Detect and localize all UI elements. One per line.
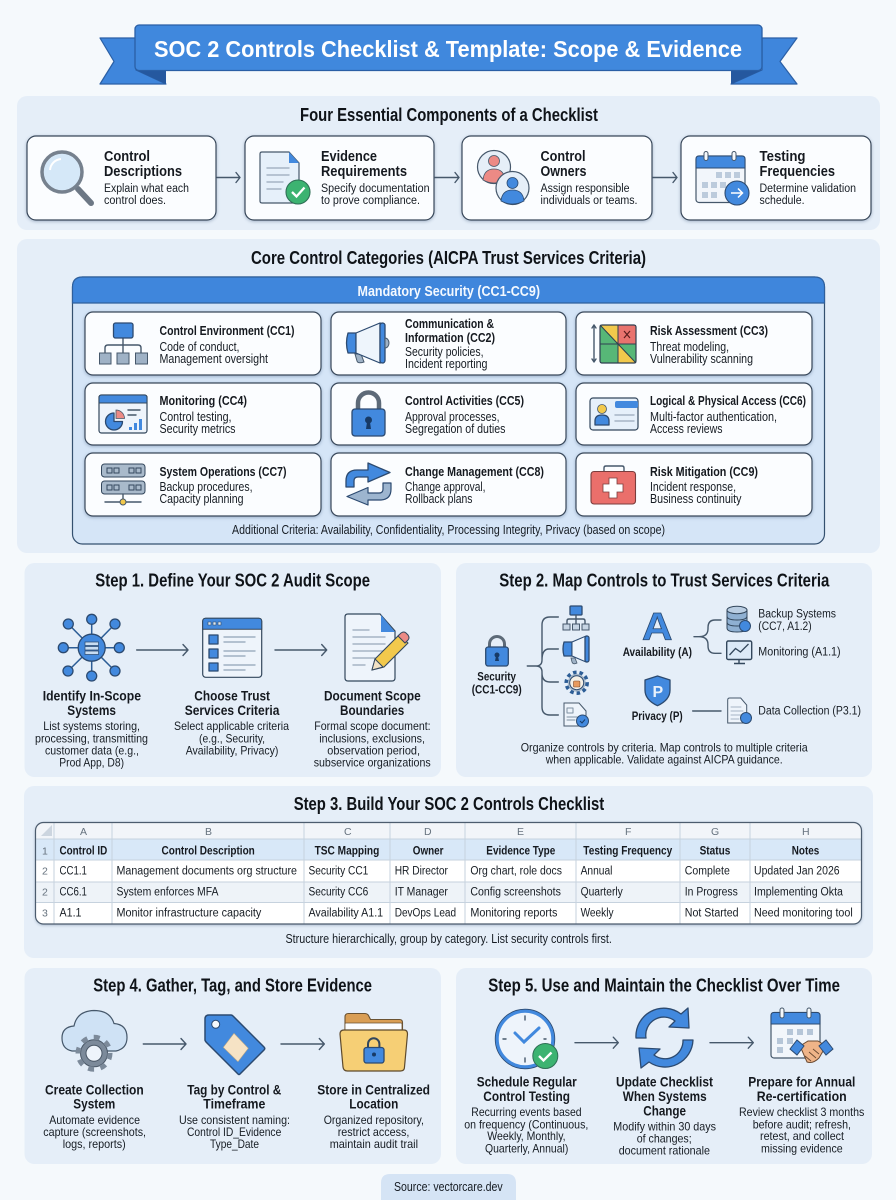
- column: identify in-scope systems: List systems storing,: [43, 719, 140, 733]
- card: CC9: Risk Mitigation (CC9): [650, 464, 758, 479]
- card: CC3: Vulnerability scanning: [650, 352, 753, 366]
- arrow: [575, 1037, 618, 1048]
- row: CC6.1: Config screenshots: [470, 887, 561, 899]
- row: A1.1: Monitoring reports: [470, 908, 558, 920]
- card: CC8: Rollback plans: [405, 492, 472, 506]
- column: update checklist when systems change: When Systems: [623, 1088, 707, 1104]
- card: CC6: Multi-factor authentication,: [650, 410, 777, 424]
- icon: data collection document: [728, 698, 752, 724]
- column: tag by control and timeframe: Tag by Control &: [187, 1081, 281, 1097]
- icon: org chart mini: [563, 606, 589, 630]
- card: CC7: Backup procedures,: [160, 480, 252, 494]
- card: CC4: Security metrics: [160, 422, 236, 436]
- icon: document with pencil: [345, 614, 409, 681]
- icon: criteria checklist window: [203, 618, 262, 677]
- row numbers: [42, 845, 48, 920]
- label: data collection: Data Collection (P3.1): [758, 705, 861, 717]
- row: A1.1: Need monitoring tool: [754, 908, 853, 920]
- card: CC3: Risk Assessment (CC3): [650, 323, 768, 338]
- panel: step 5: [456, 968, 872, 1164]
- column: identify in-scope systems: [35, 688, 148, 770]
- icon: backup database: [727, 606, 750, 632]
- table header row: Evidence Type: [486, 845, 555, 857]
- column: prepare for annual re-certification: retest, and collect: [760, 1129, 845, 1143]
- column: update checklist when systems change: Modify within 30 days: [613, 1119, 716, 1133]
- column: tag by control and timeframe: [179, 1081, 290, 1151]
- label: backup systems: [758, 609, 836, 633]
- arrow: [652, 172, 677, 182]
- card: CC1: Management oversight: [160, 352, 268, 366]
- card: CC1: [85, 312, 321, 375]
- card: CC2: Communication &: [405, 316, 494, 331]
- panel: step 4: [24, 968, 441, 1164]
- arrow: [281, 1038, 324, 1050]
- column: choose trust services criteria: Services Criteria: [185, 702, 280, 718]
- card: control owners: Assign responsible: [540, 183, 630, 195]
- icon: megaphone mini: [563, 636, 589, 664]
- row: CC1.1: Complete: [685, 865, 730, 877]
- column: schedule regular control testing: on frequency (Continuous,: [464, 1117, 588, 1131]
- card: CC3: [576, 312, 812, 375]
- bracket: security branches: [527, 617, 558, 715]
- column: document scope boundaries: Boundaries: [340, 702, 404, 718]
- arrow: [434, 172, 459, 182]
- card: testing frequencies: schedule.: [760, 195, 804, 207]
- card: CC2: Incident reporting: [405, 357, 488, 371]
- icon: calendar with handshake: [771, 1008, 833, 1062]
- column: create collection system: [43, 1081, 146, 1151]
- column letters: A: [80, 826, 87, 838]
- panel: step 2: [456, 563, 872, 777]
- row: A1.1: DevOps Lead: [395, 908, 456, 920]
- label: security: [472, 670, 522, 696]
- heading: four essential components: Four Essential Components of a Checklist: [300, 105, 598, 125]
- card: CC7: [85, 453, 321, 516]
- label: security: Security: [477, 670, 516, 684]
- column: identify in-scope systems: Prod App, D8): [59, 756, 124, 770]
- card: control owners: [462, 136, 652, 220]
- column: store in centralized location: [317, 1081, 430, 1151]
- text: step 2 note: Organize controls by criteria. Map controls to multiple criteria: [521, 740, 808, 754]
- connector: privacy: [693, 710, 721, 712]
- table header row: TSC Mapping: [315, 845, 379, 857]
- column letters: B: [205, 826, 212, 838]
- icon: privacy shield: [645, 676, 670, 706]
- column: store in centralized location: Organized repository,: [324, 1113, 424, 1127]
- arrow: [217, 172, 240, 182]
- card: CC8: Change approval,: [405, 480, 486, 494]
- row: A1.1: Weekly: [581, 908, 614, 920]
- row: CC1.1: [60, 865, 840, 877]
- card: testing frequencies: Determine validation: [760, 183, 856, 195]
- row: CC1.1: Updated Jan 2026: [754, 865, 840, 877]
- row: CC1.1: Org chart, role docs: [470, 865, 562, 877]
- card: CC6: [576, 383, 812, 445]
- column letters: E: [517, 826, 524, 838]
- card: control owners: Owners: [540, 164, 586, 180]
- column letters: D: [424, 826, 432, 838]
- text: step 3 note: Structure hierarchically, group by category. List security controls first.: [286, 932, 612, 946]
- label: backup systems: Backup Systems: [758, 609, 836, 621]
- row: CC6.1: Quarterly: [581, 887, 623, 899]
- bracket: availability branches: [694, 620, 721, 653]
- column: choose trust services criteria: Choose Trust: [194, 688, 270, 704]
- icon: locked folder: [340, 1014, 408, 1071]
- row: A1.1: A1.1: [60, 908, 82, 920]
- column: store in centralized location: maintain audit trail: [330, 1137, 418, 1151]
- icon: network of systems: [58, 614, 124, 681]
- table header row: Testing Frequency: [583, 845, 673, 857]
- icon: availability letter A: A: [642, 606, 672, 649]
- column: update checklist when systems change: [613, 1074, 716, 1158]
- row: CC1.1: HR Director: [395, 865, 448, 877]
- column: schedule regular control testing: Schedule Regular: [477, 1074, 577, 1090]
- row: A1.1: Not Started: [685, 908, 739, 920]
- column: update checklist when systems change: Update Checklist: [616, 1074, 713, 1090]
- table header row: Control ID: [60, 845, 107, 857]
- card: evidence requirements: Specify documentation: [321, 183, 430, 195]
- column: choose trust services criteria: Select applicable criteria: [174, 719, 289, 733]
- column: identify in-scope systems: Identify In-Scope: [43, 688, 141, 704]
- label: monitoring: Monitoring (A1.1): [758, 647, 841, 659]
- arrow: [275, 644, 327, 656]
- column: create collection system: System: [73, 1096, 115, 1112]
- icon: cloud with gear: [62, 1010, 127, 1069]
- table header row: Status: [700, 845, 730, 857]
- card: CC9: [576, 453, 812, 516]
- column: update checklist when systems change: Change: [643, 1102, 686, 1118]
- column letters: G: [711, 826, 719, 838]
- row: CC1.1: Annual: [581, 865, 612, 877]
- icon: evidence tag: [205, 1015, 265, 1074]
- column: update checklist when systems change: of changes;: [637, 1132, 692, 1146]
- card: CC5: Segregation of duties: [405, 422, 506, 436]
- row: CC1.1: CC1.1: [60, 865, 87, 877]
- card: evidence requirements: [245, 136, 434, 220]
- card: testing frequencies: Frequencies: [760, 164, 835, 180]
- column: document scope boundaries: Document Scope: [324, 688, 421, 704]
- panel: step 1: [24, 563, 441, 777]
- column: store in centralized location: restrict access,: [338, 1125, 409, 1139]
- row numbers: 3: [42, 908, 48, 920]
- column letters: [80, 826, 810, 838]
- row: CC1.1: Management documents org structure: [116, 865, 297, 877]
- card: CC2: Security policies,: [405, 345, 484, 359]
- footer: additional criteria: Additional Criteria: Availability, Confidentiality, Processing Integrity, Privacy (based on scope): [232, 523, 665, 537]
- column: choose trust services criteria: Availability, Privacy): [186, 744, 278, 758]
- column: tag by control and timeframe: Control ID_Evidence: [187, 1125, 282, 1139]
- row numbers: 2: [42, 865, 48, 877]
- column: prepare for annual re-certification: before audit; refresh,: [753, 1117, 851, 1131]
- card: control descriptions: Control: [104, 149, 150, 165]
- column: schedule regular control testing: Weekly, Monthly,: [487, 1129, 566, 1143]
- table: controls checklist: [36, 822, 862, 924]
- row: CC6.1: In Progress: [685, 887, 738, 899]
- heading: step 3: Step 3. Build Your SOC 2 Controls Checklist: [294, 794, 604, 814]
- column: identify in-scope systems: customer data (e.g.,: [45, 744, 139, 758]
- column: identify in-scope systems: processing, transmitting: [35, 732, 148, 746]
- arrow: [143, 1038, 186, 1050]
- icon: clock with check: [495, 1009, 558, 1069]
- table header row: Notes: [792, 845, 819, 857]
- column: create collection system: Create Collection: [45, 1081, 144, 1097]
- card: testing frequencies: [681, 136, 871, 220]
- card: control descriptions: control does.: [104, 195, 166, 207]
- column letters: H: [802, 826, 810, 838]
- column: create collection system: Automate evidence: [49, 1113, 140, 1127]
- panel: four essential components: [17, 96, 880, 230]
- panel: core control categories: [17, 239, 880, 553]
- icon: document with check: [564, 703, 588, 727]
- column: identify in-scope systems: Systems: [67, 702, 116, 718]
- icon: gear with lock: [566, 672, 587, 693]
- column: update checklist when systems change: document rationale: [619, 1144, 710, 1158]
- row: A1.1: Monitor infrastructure capacity: [116, 908, 262, 920]
- column: tag by control and timeframe: Timeframe: [203, 1096, 265, 1112]
- heading: step 2: Step 2. Map Controls to Trust Services Criteria: [499, 571, 830, 591]
- label: backup systems: (CC7, A1.2): [758, 621, 812, 633]
- card: evidence requirements: Evidence: [321, 149, 377, 165]
- column: document scope boundaries: inclusions, exclusions,: [319, 732, 425, 746]
- card: CC7: Capacity planning: [160, 492, 244, 506]
- card: CC6: Access reviews: [650, 422, 722, 436]
- card: CC7: System Operations (CC7): [160, 464, 286, 479]
- card: CC4: Monitoring (CC4): [160, 393, 247, 408]
- text: step 2 note: when applicable. Validate against AICPA guidance.: [545, 753, 783, 767]
- label: security: (CC1-CC9): [472, 682, 522, 696]
- card: CC6: Logical & Physical Access (CC6): [650, 393, 806, 408]
- icon: privacy shield: P: [652, 684, 664, 701]
- column: prepare for annual re-certification: missing evidence: [761, 1141, 843, 1155]
- row numbers: 1: [42, 845, 48, 857]
- icon: monitoring screen: [727, 641, 752, 664]
- arrow: [137, 644, 188, 656]
- title ribbon banner: SOC 2 Controls Checklist & Template: Scope & Evidence: [154, 36, 742, 62]
- card: CC4: Control testing,: [160, 410, 232, 424]
- row: CC6.1: IT Manager: [395, 887, 448, 899]
- card: CC5: Control Activities (CC5): [405, 393, 524, 408]
- row: CC6.1: Implementing Okta: [754, 887, 843, 899]
- column: document scope boundaries: Formal scope document:: [314, 719, 431, 733]
- column: schedule regular control testing: [464, 1074, 588, 1155]
- row: CC1.1: Security CC1: [308, 865, 368, 877]
- source badge: [381, 1174, 516, 1200]
- card: control descriptions: Descriptions: [104, 164, 182, 180]
- card: evidence requirements: Requirements: [321, 164, 407, 180]
- card: CC1: Control Environment (CC1): [160, 323, 294, 338]
- row: CC6.1: System enforces MFA: [116, 887, 219, 899]
- column: choose trust services criteria: (e.g., Security,: [199, 732, 265, 746]
- column: prepare for annual re-certification: Review checklist 3 months: [739, 1105, 864, 1119]
- card: CC5: [331, 383, 566, 445]
- heading: step 1: Step 1. Define Your SOC 2 Audit Scope: [95, 571, 370, 591]
- card: control descriptions: [27, 136, 216, 220]
- container: mandatory security: [72, 277, 824, 544]
- column: schedule regular control testing: Recurring events based: [471, 1105, 582, 1119]
- table header row: [60, 845, 819, 857]
- card: control descriptions: Explain what each: [104, 183, 189, 195]
- column letters: F: [625, 826, 631, 838]
- column: prepare for annual re-certification: Re-certification: [757, 1088, 847, 1104]
- column: store in centralized location: Location: [349, 1096, 398, 1112]
- column: create collection system: capture (screenshots,: [43, 1125, 146, 1139]
- text: step 2 note: [521, 740, 808, 767]
- card: evidence requirements: to prove compliance.: [321, 195, 420, 207]
- column: store in centralized location: Store in Centralized: [317, 1081, 430, 1097]
- row: A1.1: [60, 908, 853, 920]
- row numbers: 2: [42, 887, 48, 899]
- card: control owners: individuals or teams.: [540, 195, 638, 207]
- row: A1.1: Availability A1.1: [308, 908, 383, 920]
- card: control owners: Control: [540, 149, 586, 165]
- column: document scope boundaries: [314, 688, 431, 770]
- card: CC5: Approval processes,: [405, 410, 500, 424]
- card: CC9: Incident response,: [650, 480, 736, 494]
- column: tag by control and timeframe: Use consistent naming:: [179, 1113, 290, 1127]
- icon: security lock: [486, 636, 508, 666]
- column: tag by control and timeframe: Type_Date: [210, 1137, 259, 1151]
- row: CC6.1: Security CC6: [308, 887, 368, 899]
- column: prepare for annual re-certification: [739, 1074, 864, 1155]
- column: schedule regular control testing: Quarterly, Annual): [485, 1141, 568, 1155]
- card: CC2: [331, 312, 566, 375]
- heading: core control categories: Core Control Categories (AICPA Trust Services Criteria): [251, 248, 646, 268]
- card: CC8: Change Management (CC8): [405, 464, 544, 479]
- container: mandatory security: Mandatory Security (CC1-CC9): [358, 284, 540, 300]
- card: testing frequencies: Testing: [760, 149, 806, 165]
- column letters: C: [344, 826, 352, 838]
- card: CC3: Threat modeling,: [650, 340, 729, 354]
- heading: step 4: Step 4. Gather, Tag, and Store Evidence: [93, 976, 372, 996]
- card: CC1: Code of conduct,: [160, 340, 240, 354]
- title ribbon banner: [100, 25, 797, 84]
- card: CC4: [85, 383, 321, 445]
- card: CC9: Business continuity: [650, 492, 742, 506]
- column: create collection system: logs, reports): [63, 1137, 126, 1151]
- card: CC2: Information (CC2): [405, 330, 495, 345]
- label: privacy: Privacy (P): [632, 709, 683, 723]
- table header row: Control Description: [162, 845, 255, 857]
- column: prepare for annual re-certification: Prepare for Annual: [748, 1074, 855, 1090]
- table header row: Owner: [413, 845, 444, 857]
- source badge: Source: vectorcare.dev: [394, 1180, 503, 1194]
- label: availability: Availability (A): [623, 645, 692, 659]
- arrow: [710, 1037, 753, 1048]
- panel: step 3: [24, 786, 873, 958]
- column: document scope boundaries: observation period,: [327, 744, 420, 758]
- column: schedule regular control testing: Control Testing: [483, 1088, 570, 1104]
- row: CC6.1: [60, 887, 843, 899]
- column: document scope boundaries: subservice organizations: [314, 756, 431, 770]
- icon: refresh cycle: [636, 1008, 693, 1068]
- column: choose trust services criteria: [174, 688, 289, 758]
- row: CC6.1: CC6.1: [60, 887, 87, 899]
- card: CC8: [331, 453, 566, 516]
